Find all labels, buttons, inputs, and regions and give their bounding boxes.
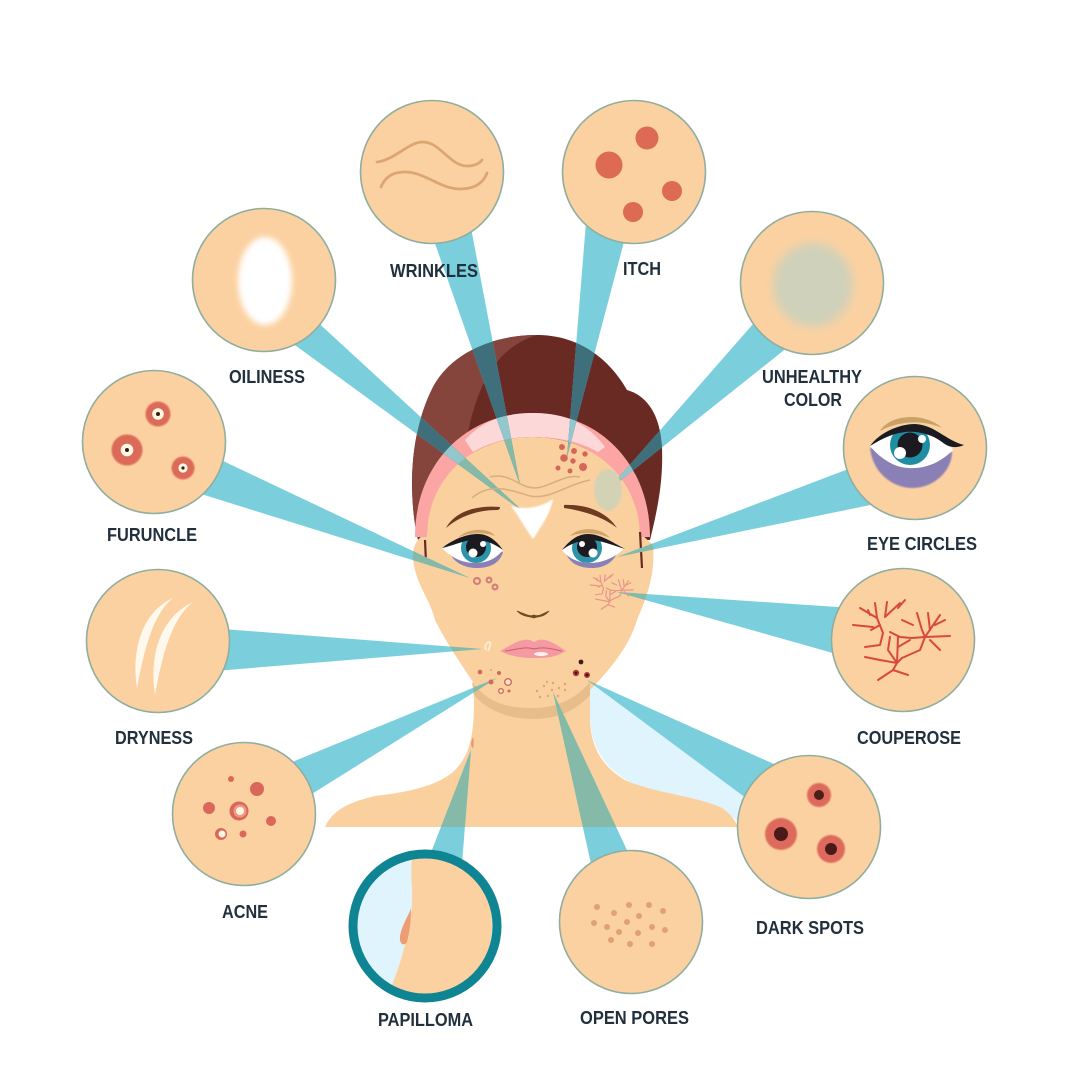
circle: eye circles — [844, 376, 986, 520]
label: eye circles: EYE CIRCLES — [867, 534, 977, 554]
label: open pores: OPEN PORES — [580, 1008, 689, 1028]
nose — [517, 611, 549, 618]
oily forehead triangle — [511, 499, 553, 539]
acne on chin — [478, 669, 510, 692]
label: unhealthy color — [762, 367, 862, 410]
circle: couperose — [832, 568, 974, 712]
label: furuncle: FURUNCLE — [107, 525, 197, 545]
circle: dryness — [86, 570, 230, 712]
circle: unhealthy color — [740, 212, 884, 354]
label: oiliness: OILINESS — [229, 367, 305, 387]
label: dark spots: DARK SPOTS — [756, 918, 864, 938]
label: unhealthy color: UNHEALTHY — [762, 367, 862, 387]
papilloma on neck — [471, 737, 474, 748]
facial features — [442, 444, 633, 748]
label: papilloma: PAPILLOMA — [378, 1010, 473, 1030]
eye: left — [442, 530, 503, 568]
label: wrinkles: WRINKLES — [390, 261, 478, 281]
headband — [415, 413, 650, 537]
circle: itch — [562, 100, 706, 244]
dryness mark near mouth — [485, 642, 491, 651]
label: dryness: DRYNESS — [115, 728, 193, 748]
eyebrows — [446, 505, 617, 528]
hair — [412, 335, 662, 540]
label: itch: ITCH — [623, 259, 661, 279]
furuncle on cheek — [474, 578, 497, 589]
open pores on chin — [536, 681, 566, 698]
circle: dark spots — [738, 756, 880, 898]
circle: papilloma — [353, 854, 497, 998]
beams connecting circles to the face — [182, 210, 890, 873]
dark spots on jaw — [573, 660, 590, 678]
eye: right — [562, 529, 625, 568]
skin: face, neck and shoulders — [325, 437, 738, 827]
label: unhealthy color: COLOR — [784, 390, 842, 410]
unhealthy colour patch — [594, 469, 622, 511]
acne rings on chin — [499, 679, 511, 693]
illustration: woman's head and shoulders — [325, 335, 738, 827]
circle: oiliness — [192, 208, 336, 352]
couperose on cheek — [590, 574, 633, 609]
lips — [500, 640, 566, 658]
circle: wrinkles — [360, 100, 504, 244]
circle: acne — [172, 742, 316, 886]
label: couperose: COUPEROSE — [857, 728, 961, 748]
circle: open pores — [560, 850, 702, 994]
label: acne: ACNE — [222, 902, 268, 922]
background panel: pale blue behind neck — [590, 682, 745, 822]
forehead wrinkles — [472, 476, 590, 498]
circle: furuncle — [82, 370, 226, 514]
itch dots — [556, 444, 588, 474]
chin shadow — [472, 682, 590, 719]
hair strands by the ears — [425, 532, 642, 568]
